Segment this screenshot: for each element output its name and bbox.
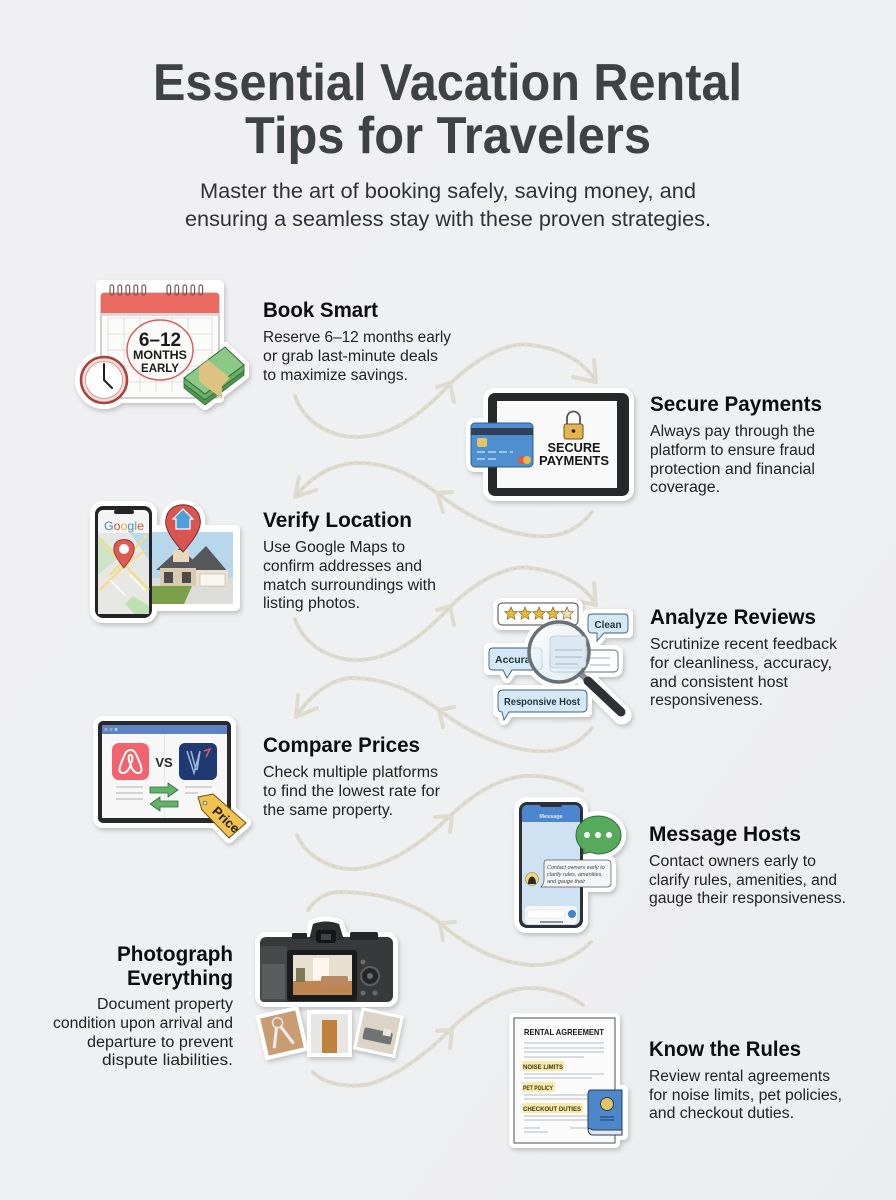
icon: phone with message bubbles: and gauge their <box>547 879 586 885</box>
title: Essential Vacation Rental <box>153 54 742 112</box>
text: Compare Prices: the same property. <box>263 802 393 819</box>
icon: magnifying glass over review bubbles: Clean <box>594 619 622 631</box>
text: Message Hosts: clarify rules, amenities, and <box>649 872 837 889</box>
text: Book Smart: to maximize savings. <box>263 367 408 384</box>
icon: calendar with clock and money: EARLY <box>141 363 179 375</box>
icon: phone with message bubbles: Message <box>539 814 563 820</box>
text: Know the Rules: Review rental agreements <box>649 1068 830 1085</box>
icon: phone map with location pin and house photo <box>95 505 235 618</box>
icon: tablet with lock and credit card <box>471 393 629 496</box>
text: Verify Location: listing photos. <box>263 595 360 612</box>
title: Tips for Travelers <box>245 107 651 165</box>
text: Know the Rules: and checkout duties. <box>649 1105 794 1122</box>
icon: rental agreement document with book: NOISE LIMITS <box>523 1064 564 1071</box>
text: Photograph Everything: condition upon arrival and <box>53 1015 233 1032</box>
icon: calendar with clock and money: 6–12 <box>139 330 181 351</box>
text: Secure Payments: protection and financial <box>650 461 815 478</box>
text: Verify Location: Verify Location <box>263 508 412 532</box>
icon: phone with message bubbles: clarify rules, amenities, <box>547 872 603 878</box>
text: Know the Rules <box>649 1037 842 1122</box>
arrow: rope from Compare Prices to Message Hosts <box>297 776 582 869</box>
text: Analyze Reviews: responsiveness. <box>650 692 763 709</box>
subtitle: ensuring a seamless stay with these proven strategies. <box>185 208 711 231</box>
icon: phone map with location pin and house photo: Google <box>104 519 144 533</box>
icon: rental agreement document with book <box>514 1018 623 1143</box>
arrow: rope from Analyze Reviews to Compare Prices <box>296 678 592 751</box>
text: Analyze Reviews: Scrutinize recent feedback <box>650 636 837 653</box>
text: Verify Location <box>263 508 436 612</box>
text: Message Hosts: Contact owners early to <box>649 853 816 870</box>
text: Know the Rules: Know the Rules <box>649 1037 801 1061</box>
icon: tablet with lock and credit card: PAYMENTS <box>539 453 609 468</box>
text: Compare Prices: Compare Prices <box>263 733 420 757</box>
text: Verify Location: confirm addresses and <box>263 558 422 575</box>
subtitle <box>185 180 711 231</box>
text: Verify Location: match surroundings with <box>263 577 436 594</box>
text: Secure Payments: Always pay through the <box>650 423 815 440</box>
icon: calendar with clock and money: MONTHS <box>133 350 187 362</box>
text: Secure Payments: coverage. <box>650 479 720 496</box>
icon: tablet with lock and credit card: SECURE <box>548 440 601 455</box>
icon: browser comparing platforms with price tag <box>98 721 246 838</box>
text: Know the Rules: for noise limits, pet policies, <box>649 1087 842 1104</box>
icon: rental agreement document with book: CHECKOUT DUTIES <box>523 1106 582 1113</box>
text: Secure Payments: Secure Payments <box>650 392 822 416</box>
text: Photograph Everything: departure to prevent <box>87 1034 234 1051</box>
icon: browser comparing platforms with price tag: Price <box>209 803 243 836</box>
text: Photograph Everything: Everything <box>127 966 233 990</box>
icon: magnifying glass over review bubbles: Responsive Host <box>504 696 580 708</box>
icon: phone with message bubbles: Contact owners early to <box>547 865 605 871</box>
text: Photograph Everything: Document property <box>97 996 233 1013</box>
icon: calendar with clock and money <box>80 285 244 405</box>
text: Book Smart <box>263 298 451 384</box>
text: Compare Prices: Check multiple platforms <box>263 764 438 781</box>
arrow: rope from Photograph Everything to Know the Rules <box>313 988 583 1086</box>
icon: rental agreement document with book: RENTAL AGREEMENT <box>524 1027 604 1037</box>
text: Book Smart: Book Smart <box>263 298 378 322</box>
text: Verify Location: Use Google Maps to <box>263 539 405 556</box>
text: Compare Prices <box>263 733 440 819</box>
text: Photograph Everything: Photograph <box>117 942 233 966</box>
arrow: rope from Message Hosts to Photograph Everything <box>308 892 591 965</box>
icon: rental agreement document with book: PET POLICY <box>523 1085 554 1092</box>
text: Photograph Everything: dispute liabilities. <box>102 1052 233 1069</box>
text: Compare Prices: to find the lowest rate for <box>263 783 440 800</box>
text: Analyze Reviews: and consistent host <box>650 674 789 691</box>
arrow: rope from Secure Payments to Verify Location <box>295 463 592 536</box>
text: Analyze Reviews: Analyze Reviews <box>650 605 816 629</box>
icon: browser comparing platforms with price tag: VS <box>155 755 173 770</box>
icon: magnifying glass over review bubbles: Accura <box>495 654 531 666</box>
text: Photograph Everything <box>53 942 234 1069</box>
text: Analyze Reviews: for cleanliness, accuracy, <box>650 655 832 672</box>
title <box>153 54 742 165</box>
text: Book Smart: or grab last-minute deals <box>263 348 438 365</box>
text: Message Hosts: gauge their responsiveness. <box>649 890 846 907</box>
text: Message Hosts: Message Hosts <box>649 822 801 846</box>
arrow: rope from Verify Location to Analyze Reviews <box>295 568 596 660</box>
icon: magnifying glass over review bubbles <box>489 603 628 720</box>
icon: phone with message bubbles <box>519 802 621 928</box>
text: Book Smart: Reserve 6–12 months early <box>263 329 451 346</box>
text: Secure Payments: platform to ensure fraud <box>650 442 815 459</box>
text: Message Hosts <box>649 822 846 907</box>
arrow: rope from Book Smart to Secure Payments <box>295 345 596 437</box>
subtitle: Master the art of booking safely, saving money, and <box>200 180 696 203</box>
text: Secure Payments <box>650 392 822 496</box>
icon: camera with property snapshots <box>255 922 404 1060</box>
text: Analyze Reviews <box>650 605 837 709</box>
